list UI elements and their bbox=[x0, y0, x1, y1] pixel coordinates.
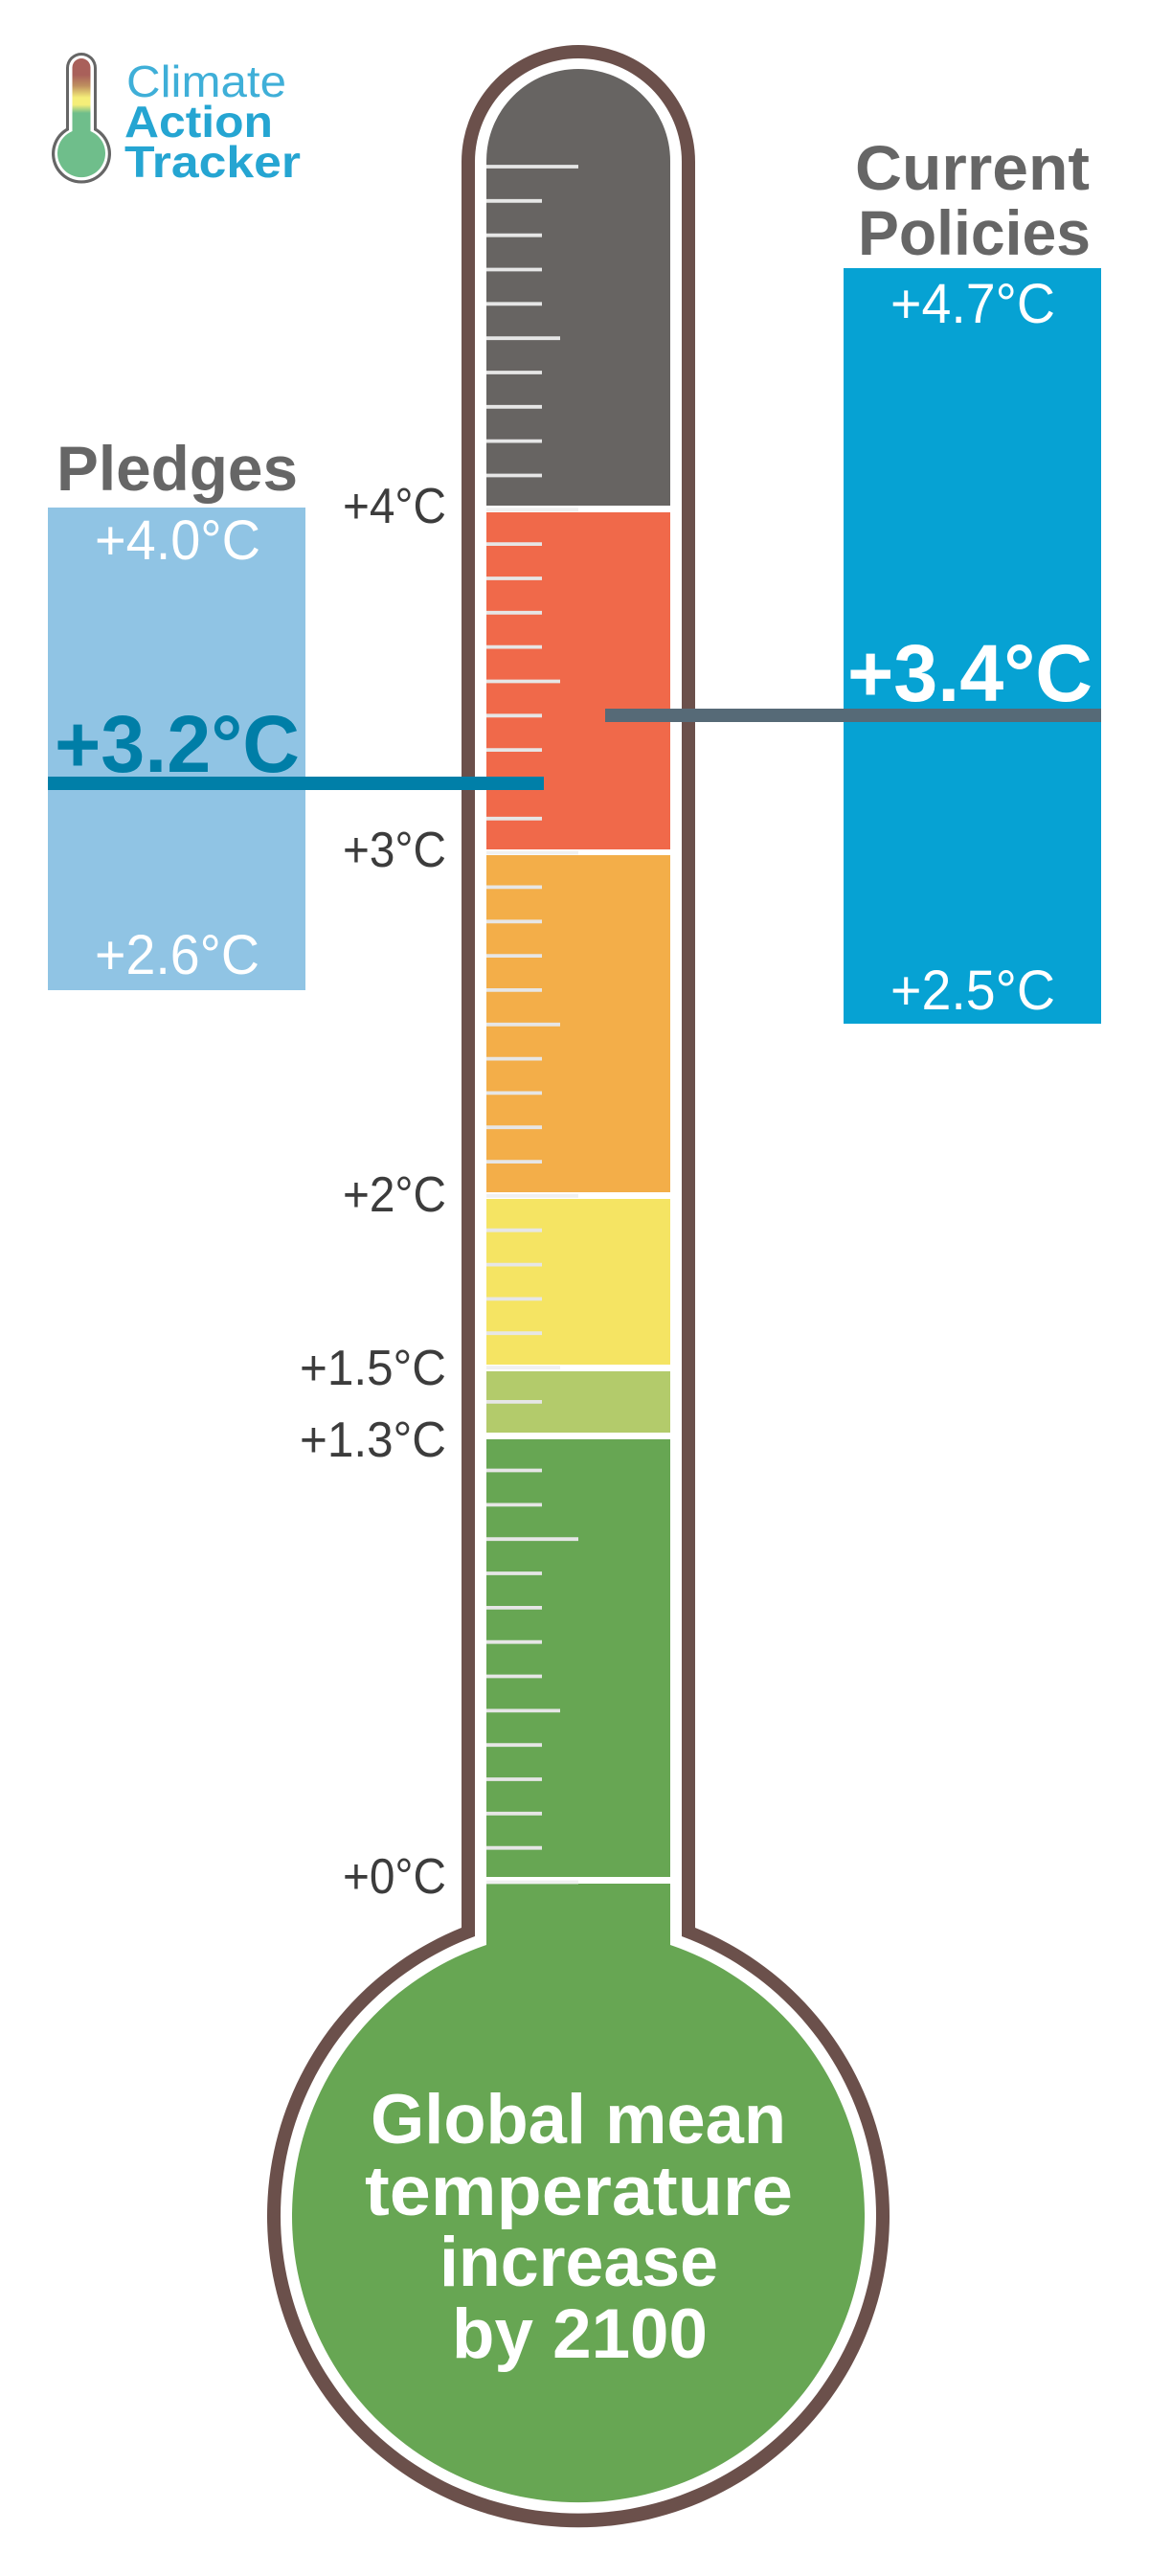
axis temperature labels: +4°C bbox=[343, 479, 446, 534]
axis temperature labels bbox=[300, 479, 446, 1905]
axis temperature labels: +1.3°C bbox=[300, 1412, 446, 1468]
panel: current policies bbox=[605, 132, 1101, 1024]
current policies low value: +2.5°C bbox=[890, 960, 1055, 1022]
panel: pledges bbox=[48, 433, 544, 990]
pledges range box bbox=[48, 508, 305, 990]
current policies marker line bbox=[605, 709, 1101, 722]
logo wordmark: Tracker bbox=[124, 137, 301, 187]
current policies high value: +4.7°C bbox=[890, 273, 1055, 335]
current policies heading bbox=[855, 132, 1091, 268]
logo wordmark: Climate bbox=[126, 56, 286, 106]
axis temperature labels: +0°C bbox=[343, 1849, 446, 1905]
axis temperature labels: +3°C bbox=[343, 823, 446, 878]
pledges high value: +4.0°C bbox=[95, 509, 260, 572]
thermometer inner white gap bbox=[281, 58, 876, 2514]
logo wordmark: Action bbox=[124, 97, 273, 147]
current policies heading: Policies bbox=[858, 197, 1091, 268]
logo wordmark bbox=[124, 56, 301, 187]
pledges heading: Pledges bbox=[56, 433, 298, 504]
bulb caption bbox=[365, 2081, 793, 2373]
current policies central value: +3.4°C bbox=[847, 628, 1093, 718]
axis temperature labels: +1.5°C bbox=[300, 1341, 446, 1396]
tick marks bbox=[486, 167, 578, 1883]
current policies range box bbox=[844, 268, 1101, 1024]
bulb caption: by 2100 bbox=[452, 2295, 708, 2373]
pledges low value: +2.6°C bbox=[95, 924, 259, 986]
axis temperature labels: +2°C bbox=[343, 1167, 446, 1223]
icon: logo thermometer bbox=[52, 53, 111, 184]
thermometer bbox=[267, 45, 890, 2527]
coloured temperature bands bbox=[287, 57, 871, 2511]
current policies heading: Current bbox=[855, 132, 1090, 203]
bulb caption: Global mean bbox=[371, 2081, 786, 2158]
bulb caption: increase bbox=[439, 2224, 718, 2301]
thermometer outline bbox=[267, 45, 890, 2527]
bulb caption: temperature bbox=[365, 2153, 793, 2230]
logo: Climate Action Tracker bbox=[52, 53, 301, 187]
pledges central value: +3.2°C bbox=[55, 699, 300, 789]
pledges marker line bbox=[48, 777, 544, 790]
